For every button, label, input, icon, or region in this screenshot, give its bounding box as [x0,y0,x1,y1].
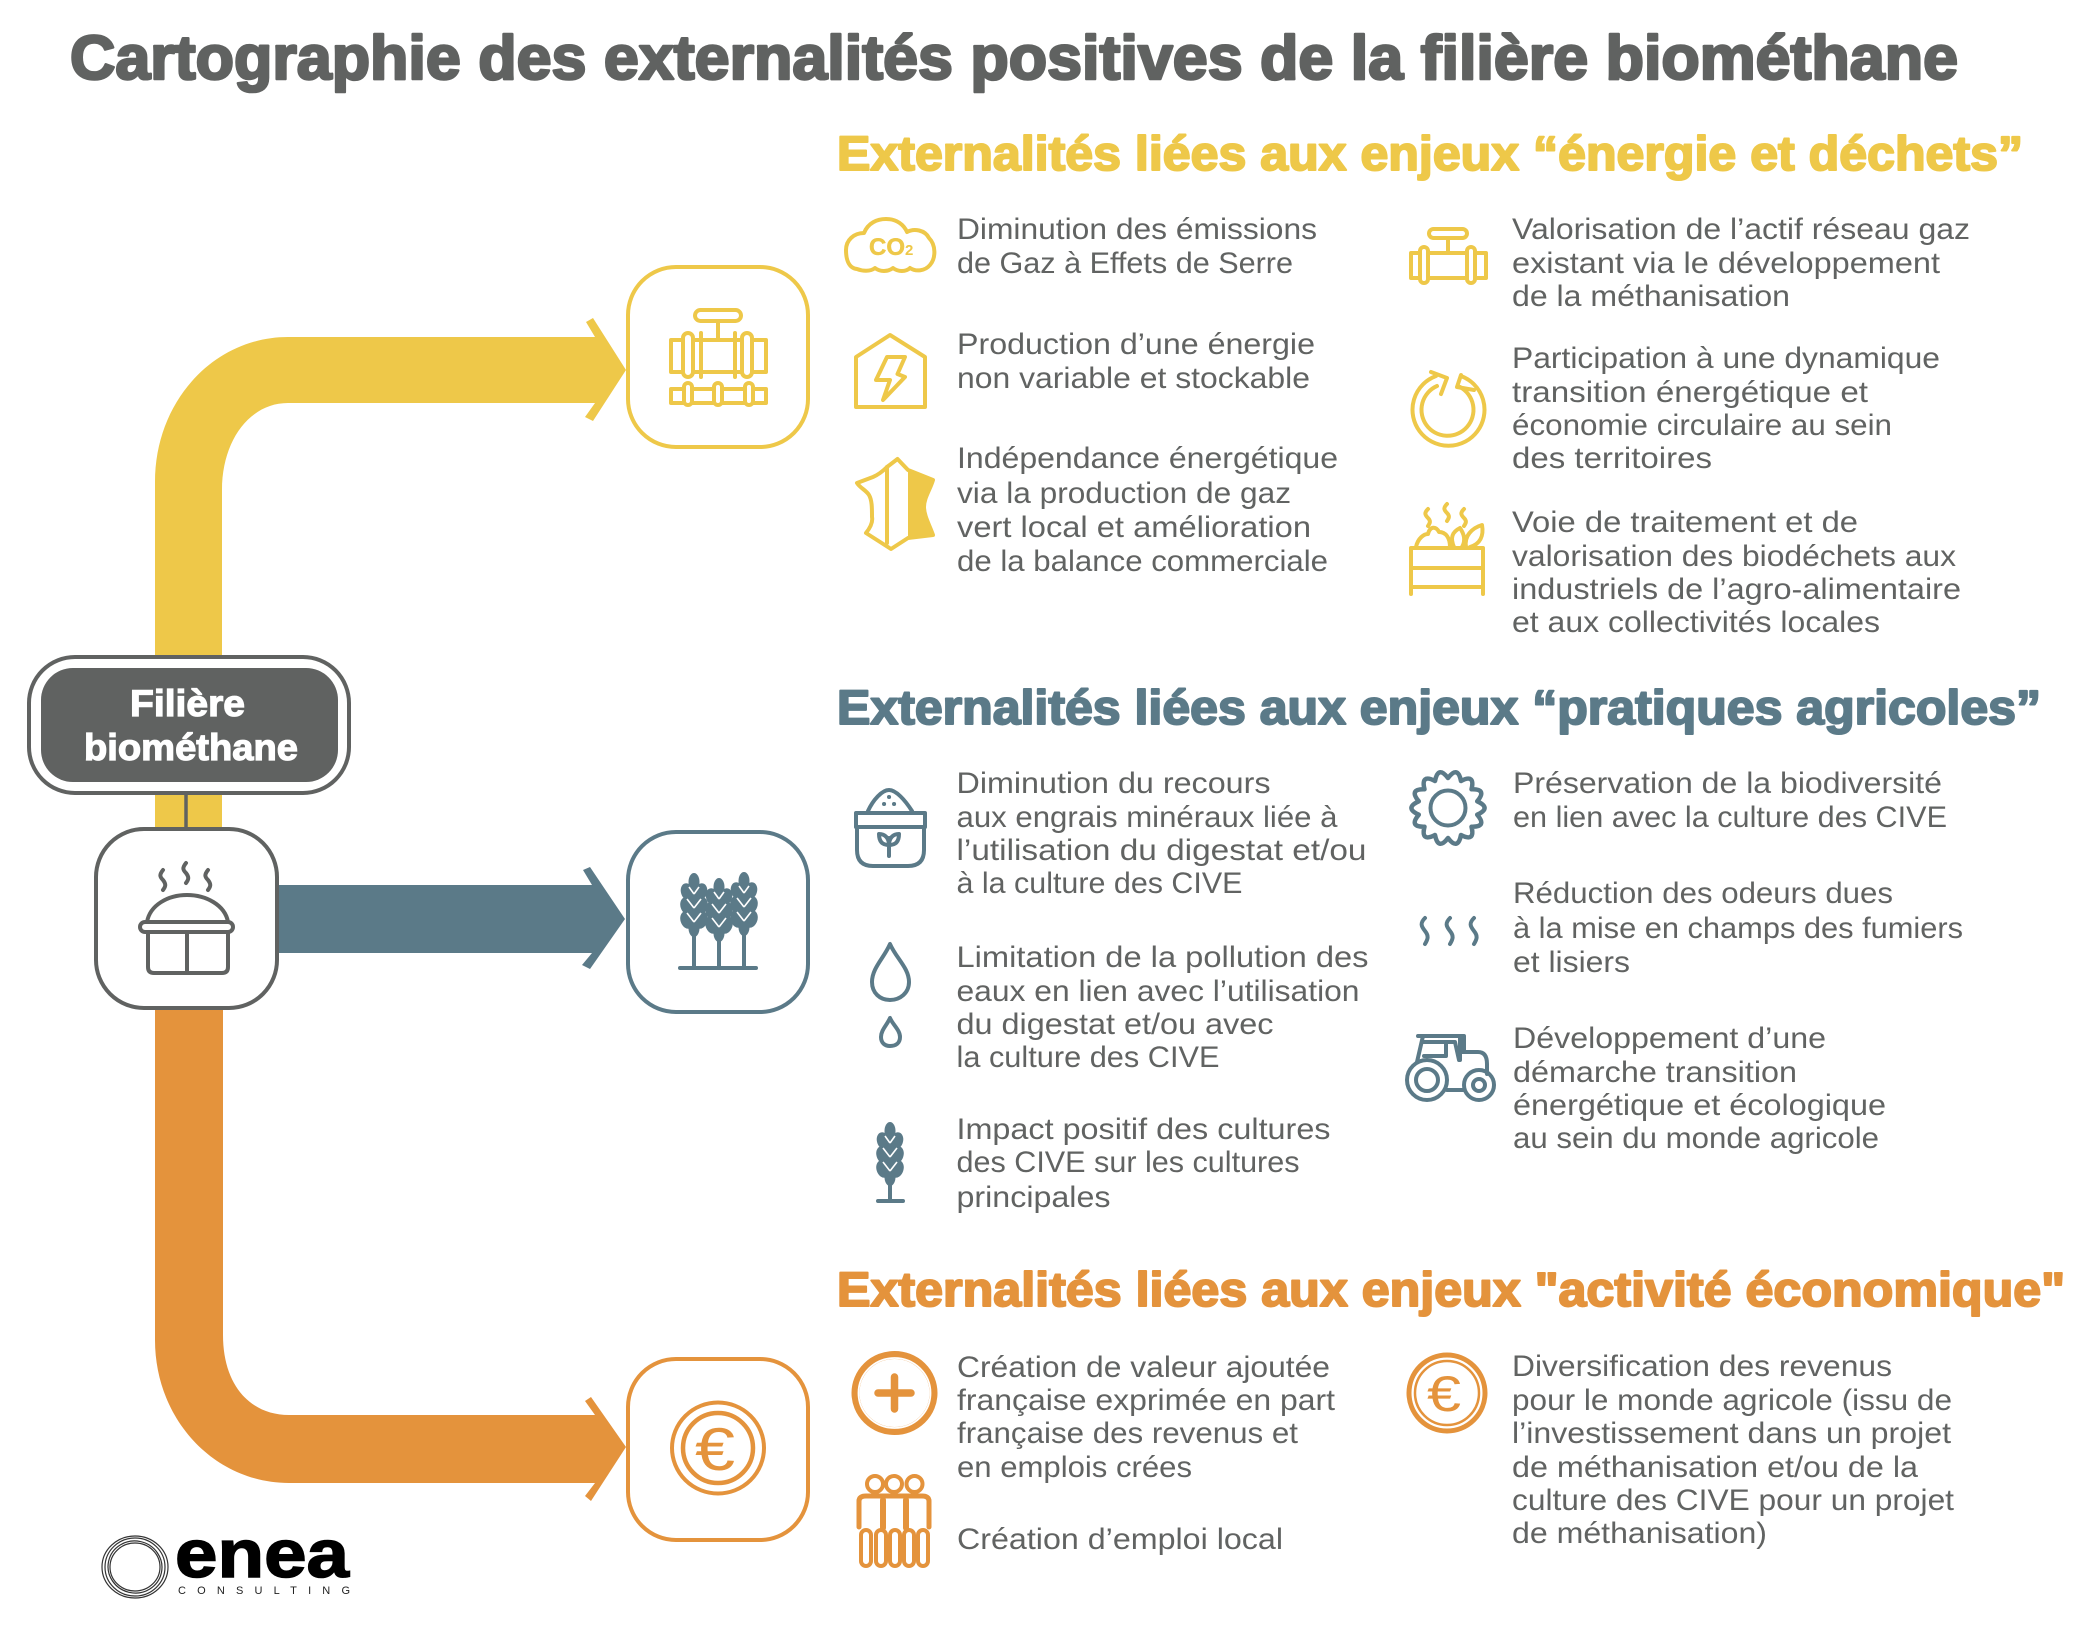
text: diversification: de méthanisation) [1512,1517,1767,1550]
text: demarche: Développement d’une [1513,1022,1826,1055]
text: engrais [956,767,1366,900]
text: odeurs: et lisiers [1513,946,1630,979]
text: diversification: culture des CIVE pour un projet [1512,1484,1955,1517]
text: biodiversite [1513,767,1947,834]
text: biodiversite: Préservation de la biodiversité [1513,767,1942,800]
icon: wheat [874,1122,906,1201]
text: GES: de Gaz à Effets de Serre [957,247,1293,280]
icon: euro coin small: € [1427,1366,1461,1422]
icon: water drops [872,944,909,1046]
icon: CO2 cloud: CO [869,234,905,261]
text: odeurs: à la mise en champs des fumiers [1513,912,1963,945]
text: reseau gaz: existant via le développement [1512,247,1941,280]
text: demarche [1513,1022,1886,1155]
text: dynamique [1512,342,1940,475]
icon: euro coin small [1409,1355,1485,1431]
text: dynamique: économie circulaire au sein [1512,409,1892,442]
icon: CO2 cloud: 2 [905,242,913,259]
icon: tractor [1407,1036,1494,1100]
text: demarche: au sein du monde agricole [1513,1122,1879,1155]
icon: cycle [1412,372,1485,446]
panel: pratiques agricoles [837,682,2041,1214]
text: biodechets: valorisation des biodéchets aux [1512,540,1956,573]
text: valeur ajoutee: Création de valeur ajoutée [957,1351,1330,1384]
text: reseau gaz: Valorisation de l’actif réseau gaz [1512,213,1970,246]
icon: house with lightning [856,335,925,407]
text: independance: Indépendance énergétique [957,442,1338,475]
arrow: yellow flow to energy [155,318,626,827]
text: reseau gaz: de la méthanisation [1512,280,1790,313]
text: energie stockable [957,328,1315,395]
logo: enea consulting: CONSULTING [178,1585,350,1597]
text: valeur ajoutee: en emplois crées [957,1451,1192,1484]
icon: euro coin: € [695,1416,735,1483]
arrow: orange flow to economy [155,1008,626,1501]
text: pollution eaux: la culture des CIVE [956,1041,1220,1074]
icon: digester [140,863,233,973]
text: independance [957,442,1338,578]
text: independance: via la production de gaz [957,477,1291,510]
icon: flower [1411,772,1485,844]
label: filière biométhane: Filière [130,683,245,724]
node: wheat box [628,832,808,1012]
icon: gas valve [1411,229,1486,283]
text: demarche: énergétique et écologique [1513,1089,1886,1122]
text: GES: Diminution des émissions [957,213,1317,246]
icon: odour wisps [1422,918,1477,944]
heading: pratiques agricoles: Externalités liées aux enjeux “pratiques agricoles” [837,682,2041,735]
label: filière biométhane: biométhane [84,727,298,768]
text: engrais: Diminution du recours [956,767,1270,800]
text: cultures [956,1113,1330,1214]
panel: energie et dechets [837,128,2023,639]
text: biodechets: Voie de traitement et de [1512,506,1858,539]
text: dynamique: transition énergétique et [1512,376,1869,409]
text: independance: vert local et amélioration [957,511,1311,544]
text: engrais: aux engrais minéraux liée à [956,801,1338,834]
node: pipeline box [628,267,808,447]
text: biodiversite: en lien avec la culture des CIVE [1513,801,1947,834]
icon: France map [857,459,934,549]
title: Cartographie des externalités positives de la filière biométhane [70,24,1958,93]
text: biodechets [1512,506,1961,639]
connector [184,794,188,828]
text: diversification: Diversification des revenus [1512,1350,1892,1383]
text: reseau gaz [1512,213,1970,313]
text: pollution eaux: du digestat et/ou avec [956,1008,1274,1041]
logo: enea consulting: enea [175,1516,350,1592]
text: diversification: de méthanisation et/ou de la [1512,1451,1918,1484]
text: valeur ajoutee: française des revenus et [957,1417,1299,1450]
text: valeur ajoutee [957,1351,1336,1484]
text: demarche: démarche transition [1513,1056,1797,1089]
text: emploi local: Création d’emploi local [957,1523,1283,1556]
text: diversification: l’investissement dans un projet [1512,1417,1952,1450]
text: cultures: Impact positif des cultures [956,1113,1330,1146]
panel: activite economique [837,1264,2065,1566]
heading: energie et dechets: Externalités liées aux enjeux “énergie et déchets” [837,128,2023,181]
text: dynamique: Participation à une dynamique [1512,342,1940,375]
logo: enea consulting [102,1516,350,1598]
heading: activite economique: Externalités liées aux enjeux "activité économique" [837,1264,2065,1317]
text: independance: de la balance commerciale [957,545,1328,578]
text: cultures: principales [956,1181,1110,1214]
text: valeur ajoutee: française exprimée en part [957,1384,1336,1417]
text: biodechets: industriels de l’agro-alimentaire [1512,573,1961,606]
icon: wheat field [678,872,760,968]
text: diversification: pour le monde agricole (issu de [1512,1384,1952,1417]
icon: pipeline [671,310,766,405]
text: diversification [1512,1350,1955,1550]
text: biodechets: et aux collectivités locales [1512,606,1880,639]
text: pollution eaux: eaux en lien avec l’utilisation [956,975,1360,1008]
node: euro box [628,1359,808,1540]
icon: CO2 cloud [846,219,934,271]
text: energie stockable: Production d’une énergie [957,328,1315,361]
icon: people [859,1476,929,1566]
text: odeurs [1513,877,1963,979]
text: pollution eaux: Limitation de la pollution des [956,941,1368,974]
label: filière biométhane [29,657,349,793]
text: pollution eaux [956,941,1368,1074]
text: odeurs: Réduction des odeurs dues [1513,877,1893,910]
text: dynamique: des territoires [1512,442,1712,475]
icon: fertilizer bag [856,790,925,866]
icon: biowaste crate [1411,504,1483,594]
icon: euro coin [672,1402,764,1494]
text: engrais: l’utilisation du digestat et/ou [956,834,1366,867]
text: engrais: à la culture des CIVE [956,867,1242,900]
text: GES [957,213,1317,280]
icon: plus coin [856,1355,934,1431]
text: energie stockable: non variable et stockable [957,362,1310,395]
arrow: teal flow to agriculture [278,867,625,969]
text: cultures: des CIVE sur les cultures [956,1146,1300,1179]
node: biogas digester [96,829,277,1008]
